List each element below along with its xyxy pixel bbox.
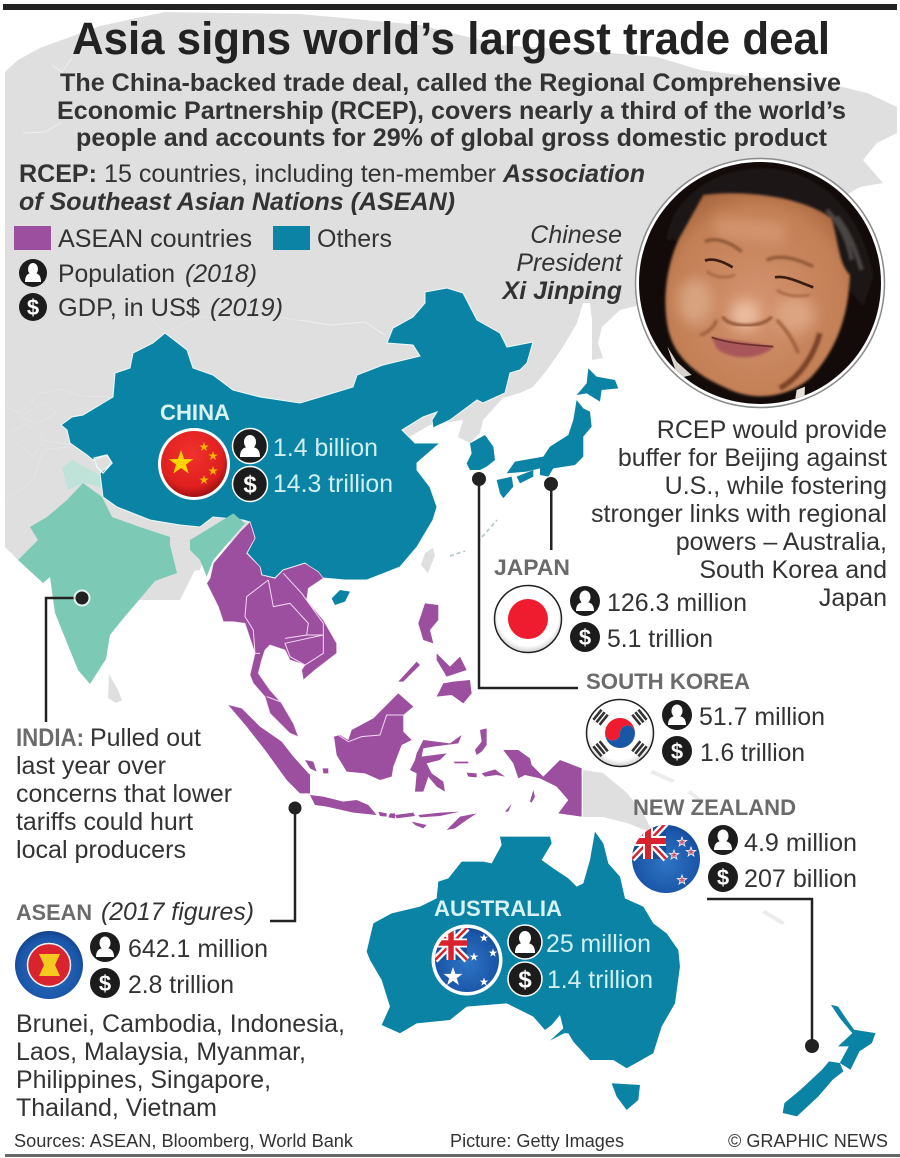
Australia GDP icon xyxy=(508,962,542,996)
South Korea flag xyxy=(586,700,654,766)
India xyxy=(18,483,177,684)
New Zealand flag xyxy=(632,825,700,893)
portrait photo of Xi Jinping xyxy=(630,155,890,415)
New Zealand label: NEW ZEALAND xyxy=(633,795,796,820)
North-east India xyxy=(190,513,245,577)
legend: others label: Others xyxy=(317,225,392,253)
South Korea GDP icon: $ xyxy=(671,739,683,764)
India note: local producers xyxy=(16,836,186,864)
Kyushu and Shikoku xyxy=(497,470,533,498)
nose xyxy=(723,317,772,325)
legend: GDP label xyxy=(58,294,283,322)
RCEP commentary text: stronger links with regional xyxy=(591,500,887,528)
legend: population label: Population xyxy=(58,260,175,288)
Ryukyu islands xyxy=(450,520,497,556)
New Zealand xyxy=(783,1005,876,1116)
South Korea label: SOUTH KOREA xyxy=(586,669,750,694)
map: India, China and neighbours xyxy=(18,288,618,684)
India note: concerns that lower xyxy=(16,780,232,808)
India note: tariffs could hurt xyxy=(16,808,193,836)
shadow by nose and jaw xyxy=(700,320,798,353)
map: white coast and border lines on grey land xyxy=(5,58,385,500)
China flag xyxy=(158,428,230,500)
bottom rule xyxy=(5,1154,900,1157)
map: grey land background xyxy=(5,12,897,600)
New Zealand GDP icon xyxy=(708,862,738,892)
Australia GDP value: 1.4 trillion xyxy=(547,966,653,994)
New Zealand GDP value: 207 billion xyxy=(744,865,857,893)
subheading xyxy=(57,69,846,152)
China population icon xyxy=(232,428,268,464)
legend: GDP label: (2019) xyxy=(210,294,283,322)
China GDP icon: $ xyxy=(243,472,257,498)
Australia GDP icon: $ xyxy=(518,966,532,994)
Japan GDP icon xyxy=(570,622,600,652)
collar xyxy=(667,347,692,378)
connector: South Korea xyxy=(472,472,578,688)
Japan GDP value: 5.1 trillion xyxy=(607,625,713,653)
connector: New Zealand xyxy=(707,899,819,1053)
eyes xyxy=(705,259,733,267)
panel: Australia xyxy=(432,896,653,996)
ASEAN label: ASEAN xyxy=(16,900,92,925)
Nepal, Bhutan and Bangladesh xyxy=(110,505,203,573)
caption: Chinese President Xi Jinping: Xi Jinping xyxy=(501,277,622,305)
panel: China xyxy=(158,400,393,502)
South Korea GDP icon xyxy=(662,736,692,766)
RCEP intro text: 15 countries, including ten-member xyxy=(104,160,496,188)
RCEP commentary text: U.S., while fostering xyxy=(665,472,887,500)
ASEAN GDP icon xyxy=(90,968,120,998)
ASEAN population icon xyxy=(90,932,120,962)
Java xyxy=(310,795,377,815)
ASEAN member list: Thailand, Vietnam xyxy=(16,1094,217,1122)
Japan flag xyxy=(494,586,562,652)
legend: GDP label: GDP, in US$ xyxy=(58,294,200,322)
ASEAN member list xyxy=(16,1010,345,1122)
New Zealand population icon xyxy=(708,825,738,855)
ASEAN internal borders xyxy=(245,573,323,702)
Mindanao xyxy=(437,680,472,703)
Western New Guinea xyxy=(503,750,582,817)
India note: last year over xyxy=(16,752,166,780)
map: Indonesia and island ASEAN xyxy=(228,680,582,830)
connector: India xyxy=(46,590,90,722)
Sumatra xyxy=(228,705,310,793)
hair xyxy=(667,168,873,307)
caption: Chinese President Xi Jinping: President xyxy=(516,249,623,277)
New Zealand GDP icon: $ xyxy=(717,865,729,890)
ASEAN population value: 642.1 million xyxy=(128,935,268,963)
China label: CHINA xyxy=(160,400,230,425)
ASEAN GDP value: 2.8 trillion xyxy=(128,971,234,999)
Australia label: AUSTRALIA xyxy=(434,896,562,921)
Japan population value: 126.3 million xyxy=(607,589,747,617)
Sulawesi xyxy=(410,735,462,792)
India note: Pulled out xyxy=(90,724,201,752)
China xyxy=(61,288,533,580)
Bangka and Belitung xyxy=(305,760,328,773)
ASEAN member list: Brunei, Cambodia, Indonesia, xyxy=(16,1010,345,1038)
Australia flag xyxy=(432,924,502,996)
RCEP commentary text xyxy=(591,416,887,612)
RCEP commentary text: Japan xyxy=(819,584,887,612)
map: mainland ASEAN and Hainan xyxy=(190,513,467,737)
legend: population icon xyxy=(19,259,47,287)
caption: Chinese President Xi Jinping: Chinese xyxy=(530,221,622,249)
Japan label: JAPAN xyxy=(494,555,570,580)
subheading: people and accounts for 29% of global gross domestic product xyxy=(76,124,828,152)
Moluccas xyxy=(453,728,535,812)
Lesser Sunda islands xyxy=(378,812,477,830)
ASEAN label xyxy=(16,898,254,926)
RCEP intro text: of Southeast Asian Nations (ASEAN) xyxy=(19,188,455,216)
footer credits: © GRAPHIC NEWS xyxy=(728,1131,888,1151)
New Zealand population value: 4.9 million xyxy=(744,829,857,857)
RCEP commentary text: South Korea and xyxy=(699,556,887,584)
South Korea population value: 51.7 million xyxy=(699,703,825,731)
ASEAN member list: Philippines, Singapore, xyxy=(16,1066,271,1094)
footer credits: Sources: ASEAN, Bloomberg, World Bank xyxy=(14,1131,354,1151)
legend xyxy=(14,225,392,322)
Hokkaido xyxy=(577,368,618,402)
caption: Chinese President Xi Jinping xyxy=(501,221,623,305)
Australia mainland and Tasmania xyxy=(367,832,680,1110)
footer credits xyxy=(14,1131,888,1151)
ASEAN emblem xyxy=(15,931,83,999)
panel: South Korea xyxy=(586,669,825,767)
RCEP commentary text: RCEP would provide xyxy=(657,416,887,444)
China GDP icon xyxy=(232,466,268,502)
connector: ASEAN xyxy=(270,802,302,921)
legend: population label xyxy=(58,260,257,288)
face xyxy=(665,193,850,396)
RCEP intro text: RCEP: xyxy=(19,160,97,188)
mouth xyxy=(712,337,773,357)
panel: ASEAN xyxy=(15,898,345,1122)
legend: GDP icon xyxy=(19,293,47,321)
China GDP value: 14.3 trillion xyxy=(273,470,393,498)
legend: GDP icon: $ xyxy=(27,295,39,320)
map: grey islands and Papua New Guinea xyxy=(108,548,785,925)
panel: Japan xyxy=(494,555,747,653)
panel: New Zealand xyxy=(630,795,857,895)
Australia population icon xyxy=(508,925,542,959)
India note: INDIA: xyxy=(16,724,84,752)
India: disputed hatch area xyxy=(62,460,105,490)
title: Asia signs world’s largest trade deal xyxy=(72,13,830,64)
legend: ASEAN swatch xyxy=(14,226,51,250)
Japan population icon xyxy=(570,586,600,616)
RCEP intro text xyxy=(19,160,645,216)
Borneo xyxy=(334,693,413,780)
South Korea xyxy=(467,435,495,470)
footer credits: Picture: Getty Images xyxy=(450,1131,624,1151)
highlights xyxy=(713,217,787,243)
RCEP commentary text: powers – Australia, xyxy=(676,528,887,556)
Philippines xyxy=(398,603,467,682)
legend: population label: (2018) xyxy=(185,260,257,288)
Borneo border xyxy=(338,715,403,742)
subheading: The China-backed trade deal, called the Regional Comprehensive xyxy=(60,69,841,97)
RCEP intro text: Association xyxy=(502,160,645,188)
China population value: 1.4 billion xyxy=(273,434,378,462)
Honshu xyxy=(507,400,592,477)
Hainan xyxy=(332,590,350,605)
connector: Japan xyxy=(544,477,558,550)
ASEAN member list: Laos, Malaysia, Myanmar, xyxy=(16,1038,306,1066)
brows and forehead lines xyxy=(705,240,813,267)
India note xyxy=(16,724,232,864)
RCEP commentary text: buffer for Beijing against xyxy=(618,444,887,472)
legend: ASEAN label: ASEAN countries xyxy=(58,225,252,253)
legend: others swatch xyxy=(273,226,310,250)
Australia population value: 25 million xyxy=(546,930,651,958)
subheading: Economic Partnership (RCEP), covers nearly a third of the world’s xyxy=(57,97,846,125)
South Korea GDP value: 1.6 trillion xyxy=(700,739,805,767)
ASEAN GDP icon: $ xyxy=(99,971,111,996)
ASEAN label: (2017 figures) xyxy=(101,898,254,926)
Japan GDP icon: $ xyxy=(579,625,591,650)
top rule xyxy=(3,4,897,10)
map: Australia and New Zealand xyxy=(367,832,876,1116)
mainland South-East Asia xyxy=(207,522,337,737)
Tibet border pocket xyxy=(94,455,112,473)
South Korea population icon xyxy=(662,700,692,730)
